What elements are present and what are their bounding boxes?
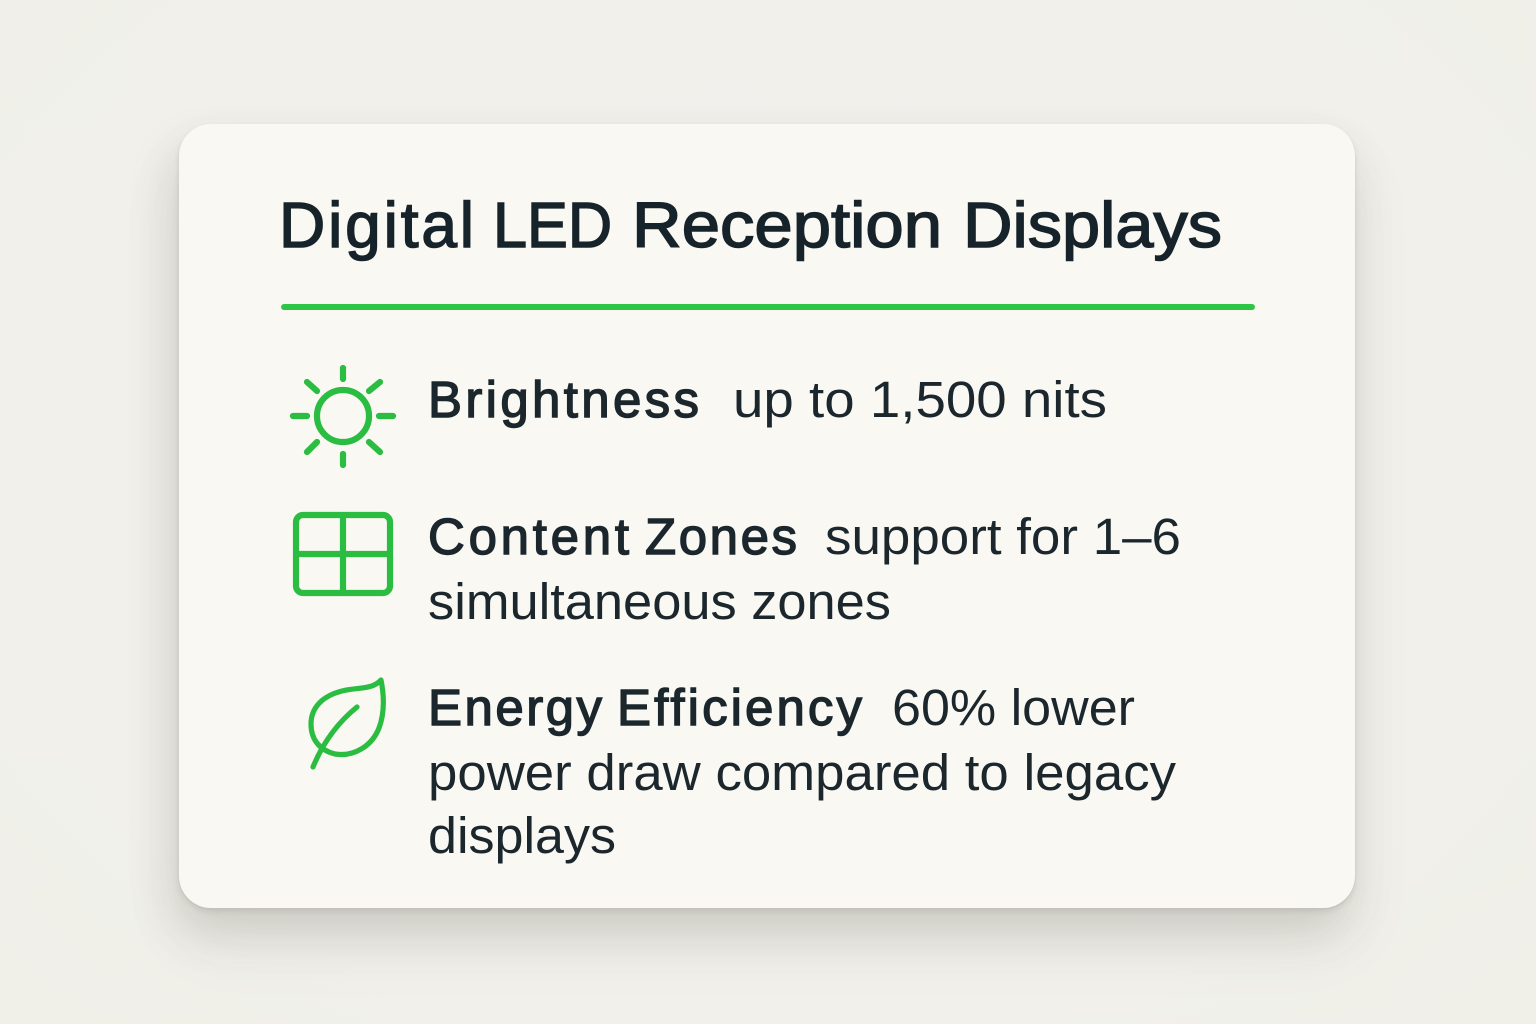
brightness text: up to 1,500 nits [733,371,1107,428]
brightness text [428,371,1107,428]
energy efficiency text: 60% lower [892,679,1135,736]
energy efficiency text: Efficiency [617,679,862,736]
content zones text [428,508,1181,630]
energy efficiency text: displays [428,807,616,864]
content zones text: Content [428,508,629,565]
energy efficiency text [428,679,1177,864]
icon: content zones grid [296,515,390,593]
title: Reception [632,189,942,261]
green title rule [281,304,1255,310]
title [279,189,1222,261]
content zones text: Zones [645,508,797,565]
title: Displays [963,189,1222,261]
icon: sun [293,368,393,465]
content zones text: simultaneous zones [428,573,891,630]
title: Digital [279,189,474,261]
title: LED [493,189,612,261]
energy efficiency text: Energy [428,679,602,736]
brightness text: Brightness [428,371,699,428]
icon: leaf [311,680,383,767]
panel: card [179,124,1355,908]
energy efficiency text: power draw compared to legacy [428,744,1177,801]
content zones text: support for 1–6 [825,508,1181,565]
